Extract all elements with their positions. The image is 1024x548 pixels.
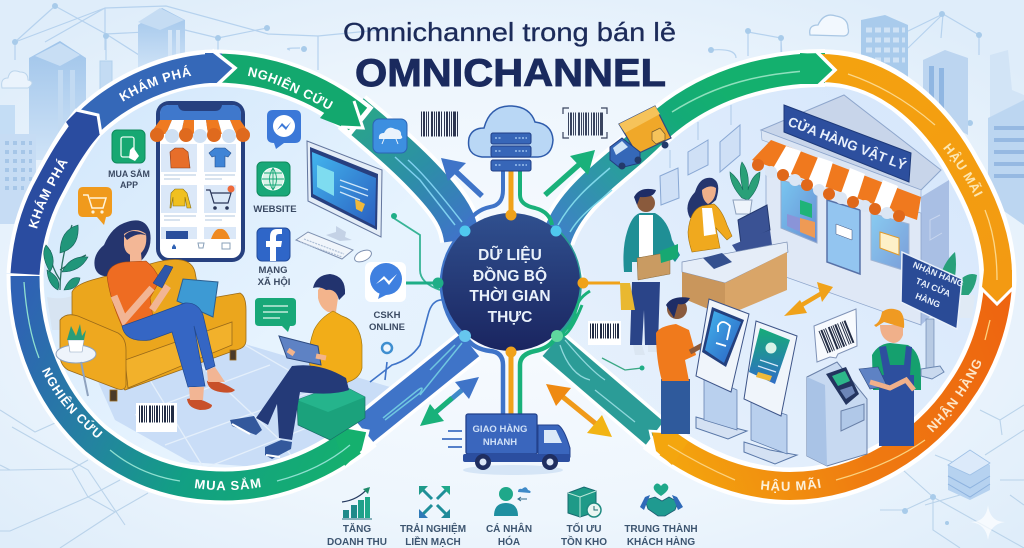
skyline right bbox=[708, 11, 1024, 225]
product: t-shirt bbox=[204, 144, 236, 172]
benefit: personalisation: CÁ NHÂN bbox=[486, 522, 532, 535]
man with tablet bbox=[230, 274, 365, 459]
kiosk two bbox=[744, 321, 797, 464]
arrow: blue to top left bbox=[441, 158, 482, 196]
store building bbox=[761, 95, 949, 325]
hub: real-time data sync: THỰC bbox=[488, 309, 532, 326]
cash register bbox=[732, 205, 772, 260]
truck: fast delivery: NHANH bbox=[483, 437, 517, 448]
store awning bbox=[752, 140, 921, 222]
wires around hub bbox=[370, 217, 642, 414]
segment: lower left journey bbox=[24, 276, 368, 486]
segment: second khám phá bbox=[89, 68, 222, 122]
arrow: green to top right bbox=[545, 150, 595, 195]
arrowhead: second khám phá bbox=[205, 50, 235, 85]
payment kiosk bbox=[807, 362, 867, 466]
icon: cloud server bbox=[466, 106, 553, 225]
icon: cloud tile bbox=[373, 119, 407, 153]
benefit: customer loyalty: KHÁCH HÀNG bbox=[627, 535, 695, 548]
icon: facebook bbox=[257, 228, 290, 288]
ring labels bbox=[28, 64, 983, 493]
truck: fast delivery bbox=[442, 414, 570, 475]
icon: shopping app: APP bbox=[120, 180, 138, 190]
road: top left data link bbox=[352, 112, 462, 240]
icon: barcode top right bbox=[563, 108, 607, 138]
sign: pickup at store: NHẬN HÀNG bbox=[912, 259, 966, 289]
floor: living room bbox=[95, 344, 390, 470]
man with package bbox=[620, 189, 680, 355]
ring labels: NHẬN HÀNG bbox=[926, 360, 982, 432]
ring labels: KHÁM PHÁ bbox=[118, 64, 192, 102]
arrow: blue green double bbox=[420, 377, 479, 426]
sofa bbox=[60, 260, 246, 401]
network lines right bbox=[880, 405, 1024, 548]
hub: real-time data sync: THỜI GIAN bbox=[469, 287, 551, 305]
benefit: personalisation bbox=[486, 487, 532, 548]
panel: online channels interior bbox=[25, 68, 470, 486]
icon: website bbox=[253, 162, 297, 215]
side table with plant bbox=[56, 324, 96, 396]
benefit: personalisation: HÓA bbox=[498, 535, 520, 548]
double arrow orange store bbox=[784, 282, 833, 316]
benefit: inventory optimisation: TỐI ƯU bbox=[567, 521, 601, 535]
plant by sign bbox=[938, 252, 977, 318]
product: hoodie bbox=[161, 144, 197, 172]
arrow: orange double bbox=[546, 384, 612, 437]
benefit: revenue growth: DOANH THU bbox=[327, 537, 387, 548]
icon: shopping app: MUA SẮM bbox=[108, 169, 150, 179]
hub: real-time data sync: DỮ LIỆU bbox=[478, 246, 542, 264]
store sign: CỬA HÀNG VẬT LÝ bbox=[786, 114, 908, 173]
counter bbox=[682, 242, 788, 316]
sign: pickup at store: TẠI CỬA bbox=[914, 275, 953, 299]
ring labels: NGHIÊN CỨU bbox=[42, 367, 103, 438]
skyline left bbox=[0, 3, 400, 224]
network lines left bbox=[0, 410, 148, 548]
barcode bubble bbox=[814, 309, 857, 362]
loop: online customer journey bbox=[25, 68, 365, 486]
truck: fast delivery: GIAO HÀNG bbox=[473, 424, 527, 435]
panel: physical store interior bbox=[550, 68, 998, 486]
plant left bbox=[44, 225, 88, 330]
sign: pickup at store: HÀNG bbox=[914, 291, 942, 310]
wall hanging cards bbox=[660, 105, 740, 205]
ring labels: HẬU MÃI bbox=[761, 477, 821, 493]
phone awning bbox=[150, 120, 250, 143]
benefit: seamless experience: TRẢI NGHIỆM bbox=[400, 522, 466, 535]
icon: website: WEBSITE bbox=[253, 204, 297, 215]
icon: messenger customer care: ONLINE bbox=[369, 322, 405, 333]
segment: nghiên cứu bbox=[215, 68, 358, 119]
sign: pickup at store bbox=[901, 252, 966, 379]
barcode: living room bbox=[136, 403, 177, 432]
road: bottom left data link bbox=[350, 343, 470, 442]
phone app bbox=[156, 101, 245, 262]
segment: upper right hậu mãi bbox=[820, 68, 1014, 304]
truck: top delivery bbox=[610, 106, 671, 170]
icon: facebook: MẠNG bbox=[258, 265, 288, 276]
icon: shopping app bbox=[108, 130, 150, 190]
segment: first khám phá bbox=[25, 110, 101, 274]
benefit: revenue growth bbox=[327, 487, 387, 548]
icon: facebook: XÃ HỘI bbox=[258, 276, 290, 288]
barcode: centre right bbox=[588, 321, 621, 345]
product: yellow sweater bbox=[161, 185, 197, 213]
benefit: seamless experience: LIỀN MẠCH bbox=[405, 535, 461, 548]
segment: lower right hậu mãi bbox=[668, 284, 998, 486]
benefit: seamless experience bbox=[400, 486, 466, 548]
ring labels: NGHIÊN CỨU bbox=[248, 67, 334, 109]
arrowhead: hậu mãi lower bbox=[650, 320, 990, 480]
hub: real-time data sync: ĐỒNG BỘ bbox=[473, 267, 547, 285]
icon: barcode top left bbox=[421, 112, 458, 136]
title bbox=[343, 17, 676, 95]
chat bubble bbox=[255, 298, 296, 332]
kiosk one bbox=[696, 299, 749, 439]
woman cashier bbox=[687, 178, 732, 252]
monitor bbox=[296, 141, 382, 264]
woman on sofa bbox=[94, 220, 235, 410]
road: top right data link bbox=[556, 68, 826, 240]
product: cart bbox=[204, 185, 236, 213]
icon: messenger customer care bbox=[365, 262, 406, 333]
worker bbox=[859, 309, 921, 446]
icon: messenger customer care: CSKH bbox=[374, 310, 401, 321]
benefit: customer loyalty: TRUNG THÀNH bbox=[624, 522, 698, 535]
icon: cart bubble bbox=[78, 187, 112, 225]
hub: real-time data sync bbox=[442, 213, 580, 351]
customer at kiosk bbox=[656, 297, 712, 434]
pillow bbox=[177, 279, 218, 317]
benefit: revenue growth: TĂNG bbox=[343, 522, 371, 535]
ring labels: HẬU MÃI bbox=[943, 143, 983, 197]
benefit: inventory optimisation: TỒN KHO bbox=[561, 535, 607, 548]
hub connector nodes bbox=[382, 210, 644, 370]
title: OMNICHANNEL bbox=[355, 52, 666, 95]
title: Omnichannel trong bán lẻ bbox=[343, 17, 676, 47]
arrowhead: green to orange bbox=[800, 52, 835, 86]
benefit: customer loyalty bbox=[624, 484, 698, 548]
loop: store customer journey bbox=[654, 68, 998, 486]
arrowhead: nghiên cứu bbox=[320, 100, 363, 128]
ring labels: KHÁM PHÁ bbox=[28, 158, 68, 228]
benefit: inventory optimisation bbox=[561, 487, 607, 548]
road: bottom right data link bbox=[552, 340, 665, 442]
plant on wall bbox=[730, 162, 760, 214]
ring labels: MUA SẮM bbox=[194, 477, 261, 490]
icon: messenger bbox=[267, 110, 301, 149]
sparkle bbox=[971, 505, 1005, 540]
